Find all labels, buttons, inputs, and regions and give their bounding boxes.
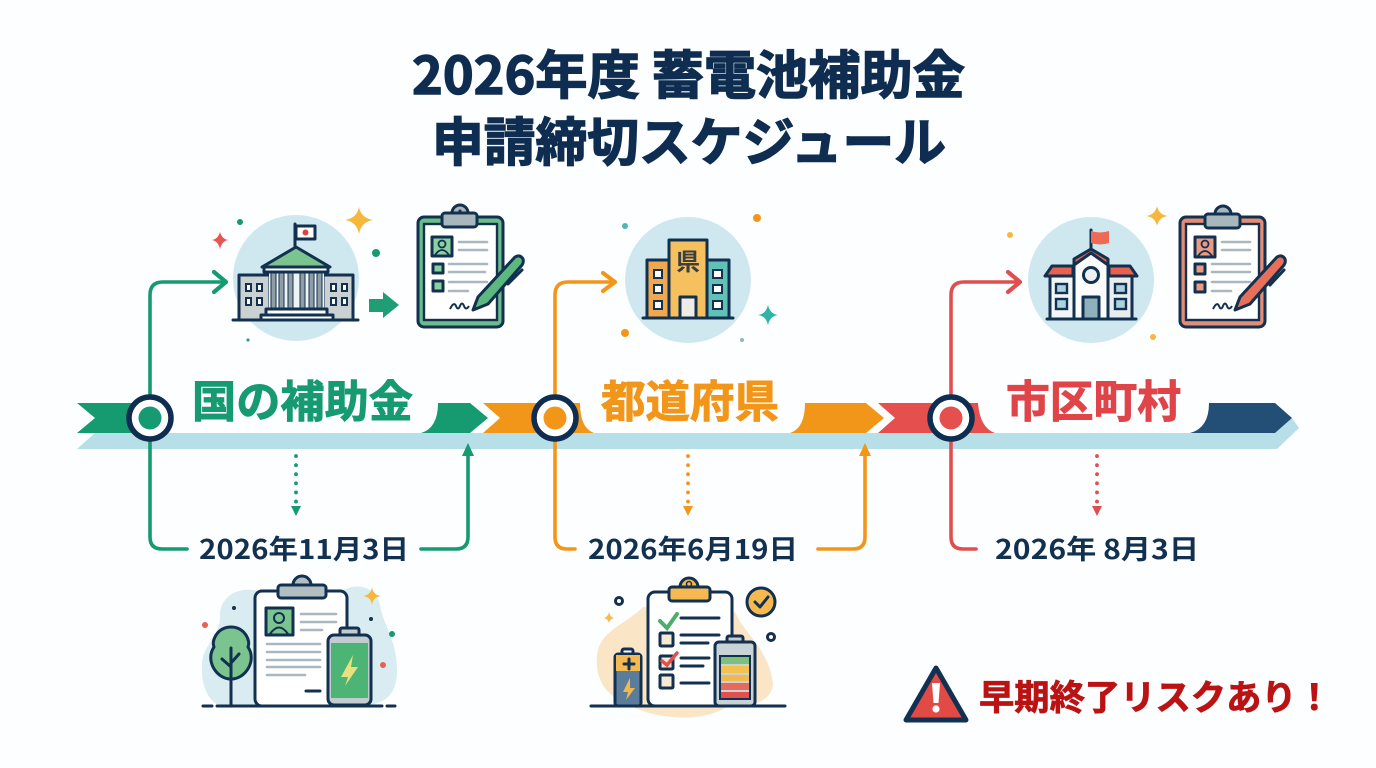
arrowheads: prefectures xyxy=(683,443,871,516)
icon: application form with pen xyxy=(418,205,523,327)
icon: prefectural office xyxy=(621,214,778,343)
deadline: national: 2026年11月3日 xyxy=(199,528,409,567)
arrowhead: municipalities xyxy=(1092,506,1102,516)
icon: prefectural office: 県 xyxy=(676,249,700,276)
deadline: municipalities: 2026年 8月3日 xyxy=(995,528,1199,567)
icon: warning triangle xyxy=(906,668,966,720)
section: municipalities xyxy=(930,206,1285,567)
icon: city hall xyxy=(1007,206,1168,343)
node: national xyxy=(129,397,171,439)
timeline ribbon xyxy=(77,403,1299,449)
callout: early termination warning xyxy=(906,668,1332,720)
heading: municipalities: 市区町村 xyxy=(1006,378,1181,427)
title xyxy=(412,34,965,176)
connector: national xyxy=(150,272,468,549)
heading: national: 国の補助金 xyxy=(192,378,413,427)
icon: application form red xyxy=(1180,206,1285,327)
section: prefectures xyxy=(534,214,871,718)
node: prefectures xyxy=(534,397,576,439)
heading: prefectures: 都道府県 xyxy=(601,378,779,427)
section: national subsidy xyxy=(129,205,523,706)
arrowheads: national xyxy=(291,443,474,516)
arrow: building to form xyxy=(369,292,399,318)
title: 2026年度 蓄電池補助金 xyxy=(412,34,965,109)
connector: municipalities xyxy=(951,272,1097,549)
warning text: 早期終了リスクあり！ xyxy=(979,679,1332,718)
icon: checklist and batteries xyxy=(591,578,785,718)
node: municipalities xyxy=(930,397,972,439)
icon: form and battery xyxy=(202,576,397,706)
icon: government building xyxy=(212,207,380,342)
title: 申請締切スケジュール xyxy=(432,101,946,176)
connector: prefectures xyxy=(555,273,865,549)
deadline: prefectures: 2026年6月19日 xyxy=(588,528,798,567)
